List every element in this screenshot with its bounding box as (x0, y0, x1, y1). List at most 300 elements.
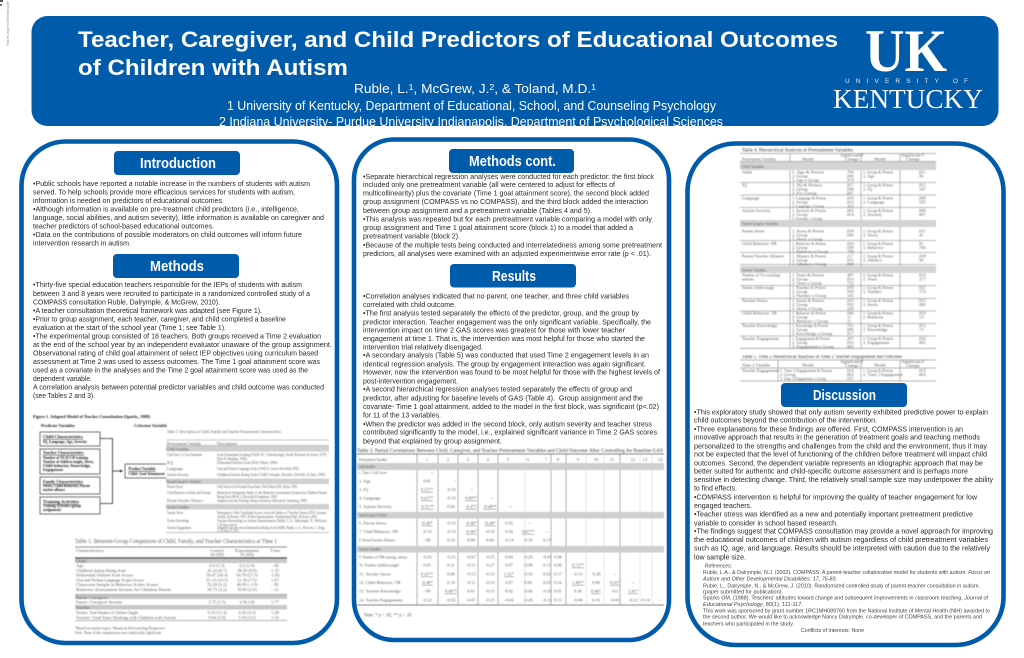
text: results bullets: •Correlation analyses indicated that no parent, one teacher, and three child variables (363, 294, 629, 301)
text: discussion bullets: not be expected that the level of functioning of the children before treatment will impact child (694, 452, 987, 459)
heading: Methods cont. (449, 149, 574, 173)
table 4: hierarchical analysis of pretreatment variables (740, 148, 936, 349)
table 5: time 2 hierarchical analysis: Model (802, 362, 815, 368)
text: results bullets: predictor interaction. Teacher engagement was the only significant variable. Specifically, the (363, 319, 651, 326)
table 3: partial correlations: Teacher Variables (359, 546, 381, 552)
table 3: partial correlations: 3. IQ (359, 487, 369, 492)
table 4: hierarchical analysis of pretreatment variables: .016 (846, 228, 854, 234)
table 3: partial correlations: 0.61** (421, 496, 433, 500)
table 4: hierarchical analysis of pretreatment variables: .013 (846, 298, 854, 303)
table 3: partial correlations: 1.40** (572, 580, 584, 585)
table 3: partial correlations: -- (529, 520, 532, 526)
table 3: partial correlations: 0.07 (505, 580, 514, 585)
table 4: hierarchical analysis of pretreatment variables: 1. Age & Pretest (792, 170, 825, 174)
table 1: between-group comparison: Classroom Sample in Behavior Scales Scores (76, 582, 158, 587)
table 3: partial correlations: 9 (577, 457, 580, 462)
text: introduction bullets: language, social abilities, and autism severity), little information is available on caregiver and (33, 215, 324, 222)
table 1: between-group comparison: Oral and Written Language Scales Scores (76, 578, 144, 582)
table 1: between-group comparison: 6.2 (1.0) (240, 563, 255, 568)
chart: figure 1 consultation model: Stress, Child Behavior, Parent (43, 483, 90, 488)
table 4: hierarchical analysis of pretreatment variables: .407 (846, 272, 854, 278)
table 4: hierarchical analysis of pretreatment variables: .040 (846, 232, 854, 238)
text: discussion bullets (694, 409, 993, 561)
table 5: time 2 hierarchical analysis: .014 (846, 368, 854, 373)
table 5: time 2 hierarchical analysis: 1. Time 2 Engagement & Pretest (780, 368, 833, 373)
table 2: description of measures: Differential Abilities Scale (DAS; Elliott, 1990) (217, 460, 277, 466)
table 3: partial correlations: -0.15 (485, 588, 495, 594)
table 3: partial correlations: 0.14 (554, 580, 563, 585)
table 4: hierarchical analysis of pretreatment variables: 2. Group (792, 232, 808, 238)
table 2: description of measures: J., & Jung, in press) (217, 522, 237, 528)
table 3: partial correlations: 10. Number children taught (359, 562, 400, 568)
text: results bullets: •The first analysis tested separately the effects of the predictor, group, and the group by (363, 311, 640, 318)
table 3: partial correlations: 11 (610, 457, 614, 462)
logo: University of Kentucky (833, 18, 983, 114)
table 3: partial correlations: 0.04 (447, 504, 456, 509)
table 3: partial correlations: Child Variables (359, 464, 375, 469)
text: methods bullets: •The experimental group consisted of 18 teachers. Both groups received a Time 2 evaluation (33, 334, 321, 340)
table 3: partial correlations: 8 (557, 457, 560, 462)
table 4: hierarchical analysis of pretreatment variables: 2. Knowledge (863, 327, 888, 332)
table 1: between-group comparison: 1.54 (271, 615, 280, 620)
table 4: hierarchical analysis of pretreatment variables: 3. Engagement x Group (792, 344, 835, 349)
table 3: partial correlations: 0.01 (543, 580, 551, 585)
table 3: partial correlations: 0.80** (465, 496, 477, 500)
table 4: hierarchical analysis of pretreatment variables: .008 (918, 196, 926, 200)
text: references and acknowledgements: Conflicts of Interests: None (801, 628, 864, 634)
table 1: between-group comparison: 50.75 (3.2) (207, 587, 227, 592)
table 4: hierarchical analysis of pretreatment variables: .011 (918, 182, 926, 188)
table 4: hierarchical analysis of pretreatment variables: 3. Stress x Group (792, 236, 823, 242)
table 3: partial correlations: 8. Parent/Teacher Alliance (359, 538, 395, 542)
text: discussion bullets: outcomes. Second, the dependent variable represents an idiographic approach that may be (694, 460, 983, 467)
table 3: partial correlations: 0.41** (421, 572, 433, 576)
heading: Results: Results (492, 268, 536, 285)
table 1: between-group comparison: 6.0 (1.3) (210, 563, 225, 568)
table 3: partial correlations: -- (431, 470, 434, 475)
table 3: partial correlations: 0.06 (554, 562, 563, 568)
table 4: hierarchical analysis of pretreatment variables: .006 (846, 174, 854, 178)
table 4: hierarchical analysis of pretreatment variables: 2. Behavior (863, 245, 884, 250)
heading: Methods: Methods (150, 258, 204, 275)
text: methods bullets: between 3 and 8 years were recruited to participate in a randomized controlled study of a (33, 291, 310, 298)
text: introduction bullets: •Although information is available on pre-treatment child predictors (i.e., intelligence, (33, 206, 299, 214)
table 3: partial correlations: -0.47* (465, 504, 477, 509)
table 4: hierarchical analysis of pretreatment variables: 2. Group (792, 258, 808, 262)
table 2: description of measures: Teacher Stress (167, 510, 183, 515)
text: references and acknowledgements: Autism and Other Developmental Disabilities. 17, 76-83. (702, 576, 837, 582)
text: introduction bullets: intervention research in autism. (33, 240, 131, 248)
table 4: hierarchical analysis of pretreatment variables: 2. Group (792, 276, 808, 282)
affiliation 1: 1 University of Kentucky, Department of Educational, School, and Counseling Psychology (227, 99, 717, 113)
table 3: partial correlations: 0.72** (572, 562, 584, 568)
table 3: partial correlations: 0.08 (592, 580, 601, 585)
chart: figure 1 consultation model: Child behavior, Knowledge, (43, 463, 91, 468)
table 3: partial correlations: -0.19 (422, 529, 432, 534)
table 1: between-group comparison: 1.29 (271, 610, 280, 615)
table 3: partial correlations: -0.14 (485, 580, 495, 585)
table 1: between-group comparison: -.50 (272, 582, 279, 587)
panel: middle column (354, 140, 669, 640)
table 4: hierarchical analysis of pretreatment variables: .41 (918, 232, 924, 238)
table 4: hierarchical analysis of pretreatment variables: Change (906, 156, 920, 162)
table 4: hierarchical analysis of pretreatment variables: .141 (846, 293, 854, 298)
table 3: partial correlations: 6. Parent Stress (359, 520, 386, 526)
table 4: hierarchical analysis of pretreatment variables: .73 (918, 327, 924, 332)
chart: figure 1 consultation model: Product Variable (128, 466, 156, 471)
table 4: hierarchical analysis of pretreatment variables: .010 (846, 196, 854, 200)
table 3: partial correlations: Table 3. Partial Correlations Between Child, Caregiver, and Teacher Pretreatment Variables and Child Outcome After Controlling for Baseline GAS (357, 447, 663, 454)
affiliation 2: 2 Indiana University- Purdue University Indianapolis, Department of Psychological Sciences (219, 115, 723, 129)
table 1: between-group comparison: *Based on teacher report; †Based on Kid-watching Perspective (75, 626, 165, 630)
table 3: partial correlations: -0.29 (542, 588, 552, 594)
text: results bullets: •When the predictor was added in the second block, only autism severity and teacher stress (363, 421, 653, 428)
text: methods continued bullets: multicollinearity) plus the covariate (Time 1 goal attainment score), the second block added (363, 190, 649, 198)
table 5: time 2 hierarchical analysis: Table 5. Time 2 Hierarchical Analysis of Time 2 Teacher Engagement and Outcome (742, 355, 903, 360)
table 4: hierarchical analysis of pretreatment variables: Model (874, 156, 887, 162)
text: results bullets: covariate- Time 1 goal attainment, added to the model in the first block, was significant (p<.02) (363, 404, 659, 411)
text: discussion bullets: better suited for authentic and child-specific outcome assessment and is perhaps more (694, 469, 968, 476)
text: results bullets: intervention impact on time 2 GAS scores was greatest for those with lower teacher (363, 328, 626, 335)
table 2: description of measures: Parent-Teacher Alliance (167, 498, 203, 503)
table 4: hierarchical analysis of pretreatment variables: 2. Age (863, 174, 875, 178)
chart: figure 1 consultation model: Teacher Characteristics (43, 450, 84, 455)
table 4: hierarchical analysis of pretreatment variables: .174 (918, 289, 926, 294)
table 3: partial correlations: -0.06 (523, 588, 533, 594)
table 3: partial correlations: 0.00 (467, 538, 476, 542)
table 4: hierarchical analysis of pretreatment variables: 1. Behavior & Pretest (792, 310, 827, 316)
title: Teacher, Caregiver, and Child Predictors of Educational Outcomes (78, 27, 838, 52)
table 3: partial correlations: -0.48** (483, 504, 497, 509)
text: methods bullets: COMPASS consultation Ruble, Dalrymple, & McGrew, 2010). (33, 300, 220, 306)
table 3: partial correlations: -0.02 (446, 598, 456, 602)
table 2: description of measures: Rating Form (BASC-2; Reynolds & Kamphaus, 2004) (217, 494, 277, 500)
text: methods bullets (33, 282, 332, 400)
table 4: hierarchical analysis of pretreatment variables: Child Behavior: PR (742, 241, 777, 246)
table 4: hierarchical analysis of pretreatment variables: Teacher Variables (742, 268, 766, 272)
table 4: hierarchical analysis of pretreatment variables: 1. Severity & Pretest (792, 208, 827, 213)
table 4: hierarchical analysis of pretreatment variables: 1. Group & Pretest (863, 323, 894, 328)
table 4: hierarchical analysis of pretreatment variables: .021 (918, 285, 926, 290)
table 4: hierarchical analysis of pretreatment variables: .323 (846, 204, 854, 208)
table 1: between-group comparison: Differential Abilities Scale Scores (76, 572, 133, 578)
table 3: partial correlations: -- (614, 572, 617, 576)
table 4: hierarchical analysis of pretreatment variables: 2. Language (863, 200, 885, 204)
table 4: hierarchical analysis of pretreatment variables: .063 (918, 340, 926, 345)
table 4: hierarchical analysis of pretreatment variables: 1. Alliance & Pretest (792, 254, 827, 258)
table 4: hierarchical analysis of pretreatment variables: Autism Severity (742, 208, 771, 213)
chart: figure 1 consultation model: Predictor Variables (41, 423, 75, 428)
table 4: hierarchical analysis of pretreatment variables: 1. Group & Pretest (863, 182, 894, 188)
table 3: partial correlations: -0.40* (421, 520, 433, 526)
title (78, 27, 838, 80)
table 3: partial correlations: 0.01 (423, 478, 431, 484)
table 4: hierarchical analysis of pretreatment variables: .011 (918, 228, 926, 234)
table 1: between-group comparison: Childhood Autism Rating Scale (76, 568, 126, 573)
text: references and acknowledgements: the second author. We would like to acknowledge Nancy Dalrymple, co-developer of COMPASS, and the parents and (703, 614, 982, 620)
text: references and acknowledgements: Educational Psychology , 80(1), 111-117. (703, 602, 803, 608)
table 3: partial correlations: Parent/Caregiver Variables (359, 512, 387, 518)
table 3: partial correlations: 1.52* (504, 572, 514, 576)
table 4: hierarchical analysis of pretreatment variables: .13 (918, 314, 924, 320)
table 3: partial correlations: -0.11 (467, 562, 475, 568)
table 3: partial correlations: 9. Number of TPR training, autism (359, 554, 407, 560)
table 3: partial correlations: 0.06 (524, 580, 533, 585)
table 3: partial correlations: 0.67** (522, 529, 534, 534)
table 4: hierarchical analysis of pretreatment variables: .535 (918, 200, 926, 204)
table 3: partial correlations: 7. Child Behavior: PR (359, 529, 398, 534)
table 3: partial correlations: -0.27 (485, 562, 495, 568)
text: results bullets: beyond that explained by group assignment. (363, 438, 502, 445)
table 3: partial correlations: 0.08 (447, 572, 456, 576)
table 3: partial correlations: 14 (658, 457, 663, 462)
text: methods continued bullets: group assignment (COMPASS vs no COMPASS), and the third block added the interaction (363, 199, 648, 206)
table 4: hierarchical analysis of pretreatment variables: .704 (918, 245, 926, 250)
table 2: description of measures: Child Behavior at Home and Teacher (167, 490, 211, 495)
table 4: hierarchical analysis of pretreatment variables: 1. IQ & Pretest (792, 182, 823, 188)
table 1: between-group comparison: 1.35 (271, 568, 280, 573)
text: methods continued bullets: included only one pretreatment variable (all were centered to adjust for effects of (363, 182, 615, 189)
table 4: hierarchical analysis of pretreatment variables: Parent-Teacher Alliance (742, 254, 784, 258)
table 2: description of measures: Ruiz & Stephan, 1994) (217, 456, 247, 462)
table 4: hierarchical analysis of pretreatment variables: 1. Group & Pretest (863, 298, 894, 303)
table 3: partial correlations: -0.15 (485, 554, 495, 560)
chart: figure 1 consultation model: IQ, Language, Age, Severity (43, 439, 88, 444)
table 4: hierarchical analysis of pretreatment variables: .007 (846, 190, 854, 196)
panel: right column (688, 144, 1004, 645)
table 4: hierarchical analysis of pretreatment variables: Teacher Stress (742, 298, 768, 303)
table 3: partial correlations: 0.51** (421, 487, 433, 492)
table 3: partial correlations: 0.36 (574, 588, 583, 594)
table 3: partial correlations: -0.06 (573, 598, 583, 602)
table 1: between-group comparison: Teacher: Total Number of Children Taught (76, 610, 139, 615)
table 3: partial correlations: -0.1 (612, 588, 618, 594)
panel: left column (22, 142, 337, 643)
text: results bullets: contributed significantly to the model, i.e., explained significant variance in Time 2 GAS scores (363, 430, 657, 437)
table 4: hierarchical analysis of pretreatment variables: .017 (846, 182, 854, 188)
table 1: between-group comparison: Experimental (235, 548, 260, 553)
table 2: description of measures: Parent/Caregiver Variables (167, 479, 201, 484)
table 4: hierarchical analysis of pretreatment variables: .90 (918, 258, 924, 262)
table 1: between-group comparison: 50.83 (2.6) (237, 587, 257, 592)
table 1: between-group comparison: 1.77 (271, 600, 280, 604)
table 3: partial correlations: 6 (527, 457, 530, 462)
table 4: hierarchical analysis of pretreatment variables: .092 (846, 302, 854, 307)
table 3: partial correlations: -0.20 (523, 554, 533, 560)
table 3: partial correlations: 0.01 (543, 572, 551, 576)
chart: figure 1 consultation model: Figure 1. Adapted Model of Teacher Consultation (Sparks, 1988) (33, 414, 150, 419)
table 1: between-group comparison: 38.30 (9.9) (237, 568, 257, 573)
heading: Introduction (114, 151, 240, 175)
table 1: between-group comparison: Characteristics (76, 548, 104, 553)
table 3: partial correlations: -0.04 (504, 598, 514, 602)
table 4: hierarchical analysis of pretreatment variables: Child Variables (742, 164, 764, 169)
text: methods bullets: dependent variable. (33, 376, 92, 383)
table 3: partial correlations: 0.11 (543, 562, 551, 568)
authors: , McGrew, J. (414, 82, 489, 96)
table 5: time 2 hierarchical analysis: Significant F (841, 359, 864, 364)
heading: Methods cont.: Methods cont. (469, 153, 556, 170)
table 3: partial correlations: 5. Autism Severity (359, 504, 393, 509)
table 4: hierarchical analysis of pretreatment variables: 1. Behavior & Pretest (792, 241, 827, 246)
table 4: hierarchical analysis of pretreatment variables: .11 (846, 314, 851, 320)
text: discussion bullets: •Teacher stress was identified as a new and potentially important pretreatment predictive (694, 512, 973, 519)
table 4: hierarchical analysis of pretreatment variables: 2. Group (792, 340, 808, 345)
table 5: time 2 hierarchical analysis: .037 (846, 376, 854, 381)
text: results bullets: engagement at time 1. That is, the intervention was most helpful for those who started the (363, 336, 645, 343)
table 1: between-group comparison: 16 (SD) (210, 552, 225, 557)
text: discussion bullets: •Three explanations for these findings are offered. First, COMPASS intervention is an (694, 426, 963, 433)
table 3: partial correlations: 0.01 (554, 588, 562, 594)
text: discussion bullets: engaged teachers. (694, 503, 752, 510)
table 4: hierarchical analysis of pretreatment variables: Pretreatment Variables (742, 156, 776, 162)
table 2: description of measures: Child Variables (167, 446, 189, 452)
table 2: description of measures: Childhood Autism Rating Scale (CARS; Schopler, Reichler, DeVellis, & Daly, 1980) (217, 472, 325, 478)
chart: figure 1 consultation model: Family Characteristics (43, 479, 83, 484)
table 4: hierarchical analysis of pretreatment variables: 2. Group (792, 212, 808, 217)
table 3: partial correlations: 4 (487, 457, 490, 462)
table 4: hierarchical analysis of pretreatment variables: 2. IQ (863, 186, 873, 192)
heading: Discussion: Discussion (813, 387, 876, 404)
table 3: partial correlations: Note. * p < .05, ** p < .01 (364, 614, 412, 618)
table 5: time 2 hierarchical analysis: .063 (918, 372, 926, 377)
authors: Ruble, L. (354, 82, 404, 96)
table 4: hierarchical analysis of pretreatment variables: 3. Behavior x Group (792, 318, 829, 324)
table 1: between-group comparison: 54.78 (27.5) (236, 572, 258, 578)
table 4: hierarchical analysis of pretreatment variables: 2. Engagement (863, 340, 890, 345)
text: references and acknowledgements: teachers who participated in the study. (703, 622, 794, 628)
table 1: between-group comparison: 9.94 (5.9) (208, 615, 226, 620)
table 3: partial correlations: 5 (507, 457, 510, 462)
table 3: partial correlations: -0.01 (542, 554, 552, 560)
heading: Results (450, 264, 576, 288)
table 3: partial correlations: 0.17 (543, 538, 552, 542)
table 4: hierarchical analysis of pretreatment variables: 1. Group & Pretest (863, 228, 894, 234)
table 4: hierarchical analysis of pretreatment variables: 1. Group & Pretest (863, 196, 894, 200)
table 4: hierarchical analysis of pretreatment variables: .046 (846, 310, 854, 316)
table 2: description of measures: Abidin, & Kmetz, 1997, Parent Questionnaire, Kinderkamp Publ. & Stress, 2002 (217, 514, 317, 520)
text: methods bullets: Observational rating of child goal attainment of select IEP objectives using curriculum based (33, 350, 318, 358)
table 4: hierarchical analysis of pretreatment variables: 1. Engagement & Pretest (792, 336, 831, 341)
table 5: time 2 hierarchical analysis: 2. Time 2 Engagement (863, 372, 904, 377)
text: methods bullets: •Prior to group assignment, each teacher, caregiver, and child completed a baseline (33, 316, 286, 324)
crop marks at page corner (0, 0, 10, 46)
text: references and acknowledgements: References: (705, 564, 732, 570)
authors: 1 (591, 83, 597, 92)
table 1: between-group comparison: -1.83 (270, 572, 280, 578)
table 2: description of measures: Autism Severity (167, 472, 190, 477)
table 3: partial correlations: -- (546, 529, 549, 534)
table 2: description of measures: Child Version of the Parental Stress Index, Third Edition (PSI; Abidin, 1995) (217, 484, 297, 490)
text: discussion bullets: to find effects. (694, 486, 737, 493)
text: discussion bullets: the educational outcomes of children with autism regardless of child pretreatment variables (694, 537, 989, 544)
table 4: hierarchical analysis of pretreatment variables: 2. Behavior (863, 314, 884, 320)
table 4: hierarchical analysis of pretreatment variables: .032 (918, 336, 926, 341)
text: methods continued bullets (363, 174, 662, 258)
table 3: partial correlations: 10 (594, 457, 599, 462)
text: discussion bullets: •COMPASS intervention is helpful for improving the quality of teacher engagement for low (694, 494, 978, 501)
table 4: hierarchical analysis of pretreatment variables: 1. Stress & Pretest (792, 298, 825, 303)
text: methods continued bullets: pretreatment variable (block 2). (363, 234, 460, 240)
table 4: hierarchical analysis of pretreatment variables: 2. Stress (863, 232, 878, 238)
table 3: partial correlations: -0.15 (573, 572, 583, 576)
text: references and acknowledgements: Ruble, L., Dalrymple, N., & McGrew, J. (2010). Randomized controlled study of parent-teacher consultation in autism. (703, 584, 980, 590)
table 5: time 2 hierarchical analysis: .063 (846, 372, 854, 377)
table 1: between-group comparison: 5.50 (3.6) (238, 615, 256, 620)
table 3: partial correlations: 0.11 (554, 598, 562, 602)
table 4: hierarchical analysis of pretreatment variables: .016 (846, 340, 854, 345)
table 5: time 2 hierarchical analysis: Model (874, 362, 887, 368)
text: references and acknowledgements: Ruble, L.A., & Dalrymple, N.J. (2002). COMPASS: A parent-teacher collaborative model for students with autism. Focus on (703, 570, 990, 576)
table 1: between-group comparison: -.44 (272, 563, 279, 568)
table 4: hierarchical analysis of pretreatment variables: .018 (918, 254, 926, 258)
table 1: between-group comparison: Control (210, 548, 224, 553)
chart: figure 1 consultation model: Training Activities (group (43, 503, 81, 508)
table 4: hierarchical analysis of pretreatment variables: 2. Group (792, 302, 808, 307)
table 4: hierarchical analysis of pretreatment variables: 1. Language & Pretest (792, 196, 827, 200)
table 2: description of measures: Emergency Only Teaching Scores from the Index of Teacher Stress (ITS; Greene, (217, 510, 327, 516)
table 4: hierarchical analysis of pretreatment variables: Change (845, 156, 859, 162)
table 4: hierarchical analysis of pretreatment variables: .018 (846, 289, 854, 294)
text: methods bullets: A correlation analysis between potential predictor variables and child outcome was conducted (33, 384, 324, 392)
text: discussion bullets: •This exploratory study showed that only autism severity exhibited predictive power to explain (694, 409, 988, 416)
table 4: hierarchical analysis of pretreatment variables: 2. Group (792, 174, 808, 178)
text: references and acknowledgements: (paper submitted for publication). (703, 590, 783, 596)
table 4: hierarchical analysis of pretreatment variables: .01 (918, 241, 924, 246)
table 4: hierarchical analysis of pretreatment variables: .003 (846, 208, 854, 213)
table 4: hierarchical analysis of pretreatment variables: 3. Language x Group (792, 204, 825, 208)
table 4: hierarchical analysis of pretreatment variables: .794 (846, 170, 854, 174)
text: introduction bullets: •Public schools have reported a notable increase in the numbers of students with autism (33, 181, 310, 188)
table 4: hierarchical analysis of pretreatment variables: 1. Group & Pretest (863, 272, 894, 278)
table 4: hierarchical analysis of pretreatment variables: .011 (846, 258, 854, 262)
table 4: hierarchical analysis of pretreatment variables: Language (742, 196, 759, 200)
table 3: partial correlations: 0.16 (592, 598, 601, 602)
authors: 2 (489, 83, 495, 92)
text: methods bullets: at the end of the school year by an independent evaluator unaware of the group assignment. (33, 342, 332, 349)
text: results bullets: for 11 of the 13 variables. (363, 412, 441, 419)
table 3: partial correlations: -- (510, 504, 513, 509)
table 3: partial correlations: 0.06 (554, 554, 563, 560)
table 2: description of measures: Table 2. Description of Child, Family and Teacher Pretreatment Characteristics (167, 429, 281, 435)
table 4: hierarchical analysis of pretreatment variables: IQ (742, 182, 747, 188)
table 4: hierarchical analysis of pretreatment variables: .011 (918, 170, 926, 174)
table 4: hierarchical analysis of pretreatment variables: 3. Stress x Group (792, 306, 823, 311)
table 3: partial correlations: -0.40* (484, 520, 496, 526)
table 4: hierarchical analysis of pretreatment variables: 3. IQ x Group (792, 190, 817, 196)
table 3: partial correlations: -0.11 (467, 580, 475, 585)
table 4: hierarchical analysis of pretreatment variables: Significant F (902, 152, 925, 158)
table 3: partial correlations: 0.40** (445, 588, 457, 594)
table 4: hierarchical analysis of pretreatment variables: 3. Behavior x Group (792, 249, 829, 254)
table 3: partial correlations: -0.15 (485, 598, 495, 602)
table 4: hierarchical analysis of pretreatment variables: .008 (918, 208, 926, 213)
chart: figure 1 consultation model: Training Activities (43, 499, 79, 504)
table 3: partial correlations: -0.19 (446, 487, 456, 492)
table 4: hierarchical analysis of pretreatment variables: 3. Knowledge x Group (792, 331, 833, 336)
chart: figure 1 consultation model: Criterion Variable (134, 423, 167, 428)
table 4: hierarchical analysis of pretreatment variables: 1. Group & Pretest (863, 170, 894, 174)
table 4: hierarchical analysis of pretreatment variables: 1. Years & Pretest (792, 272, 825, 278)
text: discussion bullets: sensitive in detecting change. Third, the relatively small sample size may underpower the ability (694, 477, 993, 484)
table 4: hierarchical analysis of pretreatment variables: 2. Stress (863, 302, 878, 307)
table 3: partial correlations: -0.46* (465, 520, 477, 526)
table 1: between-group comparison: Teacher (76, 605, 90, 610)
table 1: between-group comparison: 41.43 (8.7) (207, 568, 227, 573)
table 4: hierarchical analysis of pretreatment variables: 2. Group (792, 327, 808, 332)
table 2: description of measures (166, 429, 330, 534)
table 4: hierarchical analysis of pretreatment variables: .917 (846, 331, 854, 336)
